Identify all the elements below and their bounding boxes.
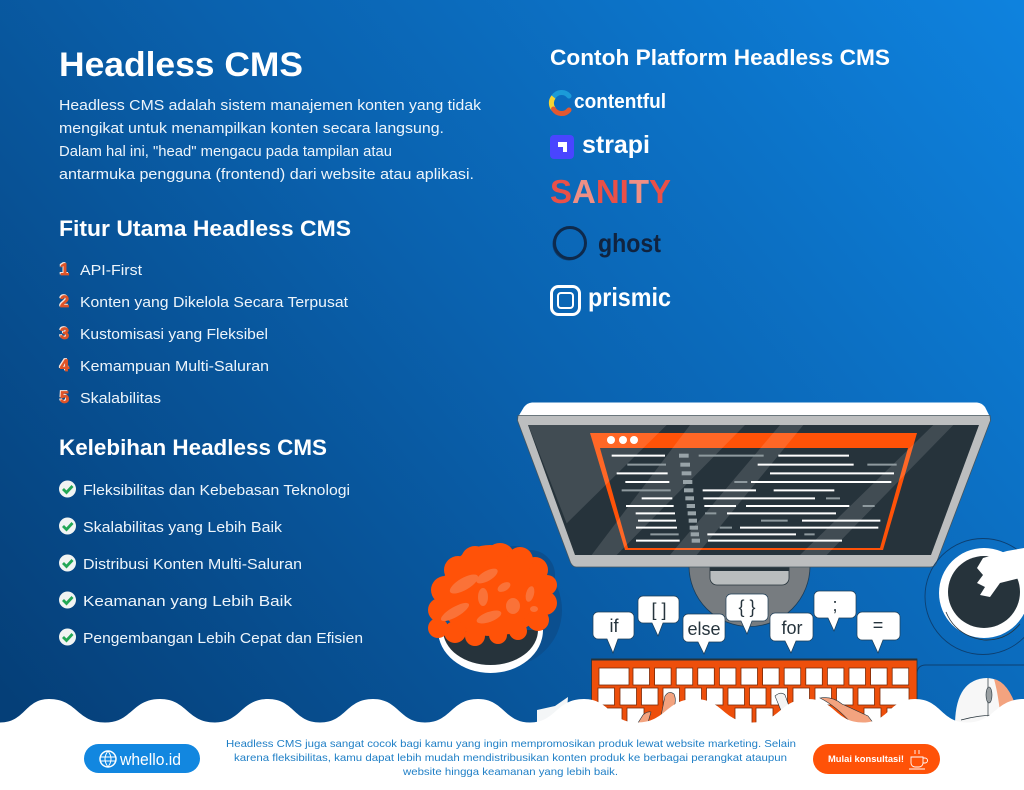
advantage 3: Distribusi Konten Multi-Saluran <box>83 557 302 573</box>
footer description <box>226 738 796 778</box>
feature 5 <box>60 389 161 407</box>
bubble: else: else <box>687 619 721 639</box>
heading: contoh platform: Contoh Platform Headless CMS <box>550 45 890 70</box>
advantage 2 <box>59 518 283 536</box>
bubble: equals: = <box>873 615 883 635</box>
mouse pad and mouse <box>917 665 1024 723</box>
bubble: brackets: [ ] <box>651 600 667 620</box>
footer description: karena fleksibilitas, kamu dapat lebih mudah mendistribusikan konten produk ke berbagai perangkat ataupun <box>234 752 787 764</box>
whello.id badge <box>84 744 200 773</box>
logo: sanity: SANITY <box>550 173 671 210</box>
bubble: equals <box>857 612 900 653</box>
feature 5: 5 <box>60 389 69 407</box>
whello.id badge: whello.id <box>119 750 181 769</box>
consultation button: Mulai konsultasi! <box>828 754 904 765</box>
feature 1: 1 <box>60 261 69 279</box>
advantage 4: Keamanan yang Lebih Baik <box>83 594 293 610</box>
bubble: for <box>770 613 813 653</box>
bubble: for: for <box>781 618 803 638</box>
bubble: semicolon <box>814 591 856 631</box>
intro paragraph <box>59 98 482 183</box>
footer panel with wavy edge <box>0 699 1024 790</box>
illustration: desk with computer <box>428 402 1024 729</box>
bubble: if <box>593 612 634 653</box>
coffee cup <box>925 538 1024 654</box>
logo: prismic: prismic <box>588 282 671 312</box>
heading: kelebihan: Kelebihan Headless CMS <box>59 435 327 460</box>
feature 3: Kustomisasi yang Fleksibel <box>80 327 268 343</box>
code window frame <box>590 433 917 550</box>
logo: ghost <box>553 228 661 260</box>
feature 4: Kemampuan Multi-Saluran <box>80 359 269 375</box>
advantage 1: Fleksibilitas dan Kebebasan Teknologi <box>83 483 350 499</box>
bowl shadow <box>448 546 562 667</box>
logo: prismic <box>552 282 671 314</box>
advantage 2: Skalabilitas yang Lebih Baik <box>83 520 283 536</box>
bowl food highlights <box>439 566 538 626</box>
bubble: semicolon: ; <box>832 595 838 615</box>
heading: fitur utama: Fitur Utama Headless CMS <box>59 216 351 241</box>
monitor stand <box>689 566 810 626</box>
feature 3: 3 <box>60 325 69 343</box>
bowl rim <box>438 630 543 673</box>
bubble: if: if <box>610 616 619 636</box>
checklist of advantages <box>59 480 363 647</box>
intro paragraph: Dalam hal ini, "head" mengacu pada tampilan atau <box>59 144 392 160</box>
advantage 4 <box>59 592 293 610</box>
bubble: braces <box>726 594 768 634</box>
monitor top <box>518 402 990 417</box>
code speech bubbles <box>593 591 900 654</box>
title: Headless CMS <box>59 46 303 84</box>
key row 1 <box>599 668 909 685</box>
monitor <box>518 402 990 567</box>
feature 5: Skalabilitas <box>80 391 161 407</box>
feature 1: API-First <box>80 263 142 279</box>
typing hands <box>636 692 874 726</box>
bubble: braces: { } <box>738 597 756 617</box>
logo: ghost: ghost <box>598 228 661 258</box>
screen <box>528 425 979 555</box>
key row 2 <box>598 688 909 705</box>
feature 1 <box>60 261 142 279</box>
paper note <box>537 697 568 723</box>
key row 3 <box>605 708 904 725</box>
logo: strapi <box>550 131 650 159</box>
bubble: else <box>683 614 725 654</box>
footer description: Headless CMS juga sangat cocok bagi kamu yang ingin mempromosikan produk lewat website marketing. Selain <box>226 738 796 750</box>
bubble: brackets <box>638 596 679 636</box>
logo: strapi: strapi <box>582 131 650 159</box>
platform logos <box>550 91 671 314</box>
orange food <box>428 543 557 646</box>
code window body <box>600 448 908 548</box>
logo: contentful: contentful <box>574 91 666 113</box>
consultation button <box>813 744 940 774</box>
intro paragraph: mengikat untuk menampilkan konten secara langsung. <box>59 121 444 137</box>
intro paragraph: antarmuka pengguna (frontend) dari website atau aplikasi. <box>59 167 474 183</box>
window dots <box>607 436 638 444</box>
code lines <box>612 454 897 543</box>
footer description: website hingga keamanan yang lebih baik. <box>402 766 618 778</box>
keyboard <box>592 658 917 729</box>
bowl of food <box>428 543 562 673</box>
monitor frame <box>518 416 990 567</box>
bowl inside <box>443 630 538 665</box>
advantage 5: Pengembangan Lebih Cepat dan Efisien <box>83 631 363 647</box>
intro paragraph: Headless CMS adalah sistem manajemen konten yang tidak <box>59 98 482 114</box>
numbered feature list <box>60 261 348 407</box>
screen reflections <box>528 425 953 555</box>
feature 2: Konten yang Dikelola Secara Terpusat <box>80 295 348 311</box>
feature 4: 4 <box>60 357 70 375</box>
feature 2: 2 <box>60 293 69 311</box>
